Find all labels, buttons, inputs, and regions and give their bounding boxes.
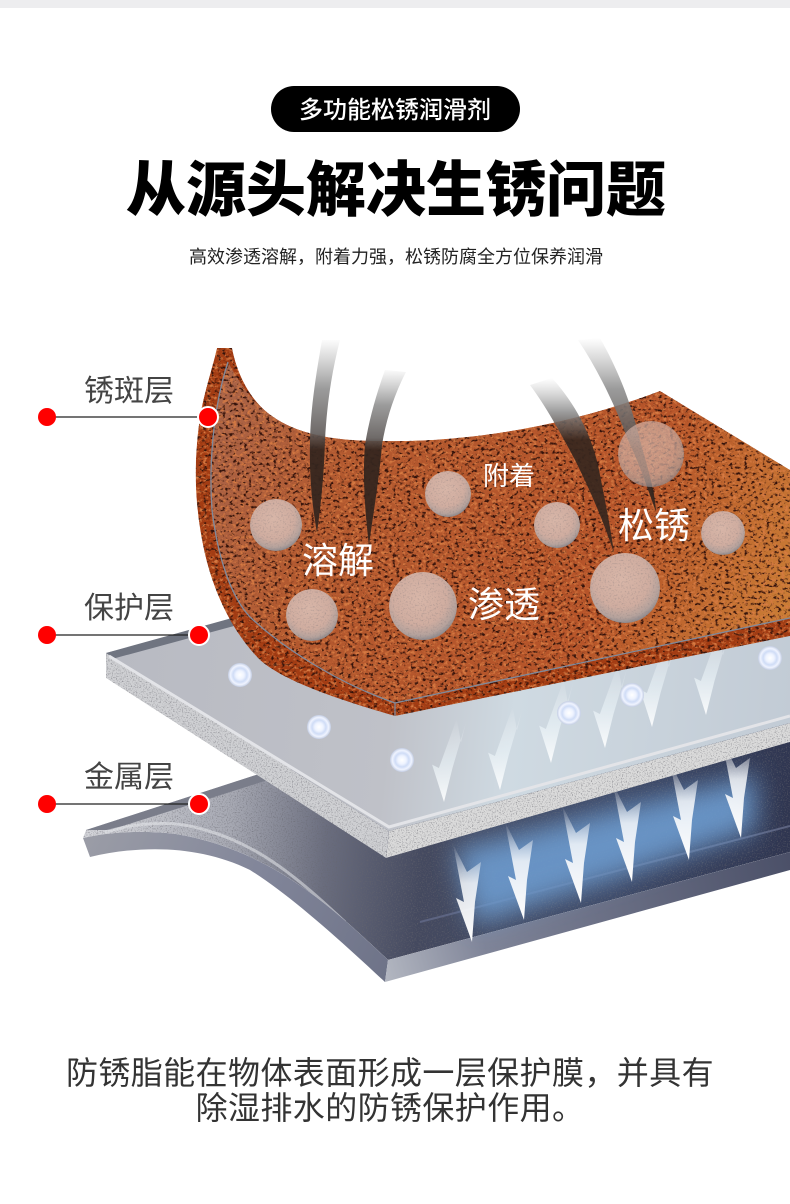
bottom caption <box>66 1055 714 1126</box>
protective layer <box>106 600 790 858</box>
metal layer <box>83 700 790 982</box>
penetration streaks <box>310 338 656 553</box>
label: 附着: 附着 <box>483 461 535 491</box>
label: 松锈: 松锈 <box>618 505 690 546</box>
callout: 锈斑层: 锈斑层 <box>84 375 174 408</box>
water droplets <box>228 646 782 772</box>
rust layer <box>196 348 790 716</box>
badge: product type <box>271 86 520 132</box>
subtitle: 高效渗透溶解，附着力强，松锈防腐全方位保养润滑 <box>189 247 603 267</box>
label: 溶解: 溶解 <box>302 540 374 581</box>
rust balls <box>250 421 745 641</box>
bottom caption: 防锈脂能在物体表面形成一层保护膜，并具有 <box>66 1055 714 1091</box>
layered diagram <box>83 338 790 982</box>
callout: 锈斑层 <box>38 375 218 427</box>
callout: 保护层: 保护层 <box>84 592 174 625</box>
blue glow behind metal arrows <box>455 775 755 925</box>
top grey strip <box>0 0 790 8</box>
slab arrows <box>432 632 729 802</box>
title: 从源头解决生锈问题 <box>126 157 666 224</box>
callout: 保护层 <box>38 592 209 645</box>
callout: 金属层: 金属层 <box>84 761 174 794</box>
bottom caption: 除湿排水的防锈保护作用。 <box>196 1090 584 1126</box>
badge: product type: 多功能松锈润滑剂 <box>299 97 491 124</box>
callout: 金属层 <box>38 761 209 814</box>
label: 渗透: 渗透 <box>468 584 540 625</box>
metal arrows <box>453 740 750 942</box>
